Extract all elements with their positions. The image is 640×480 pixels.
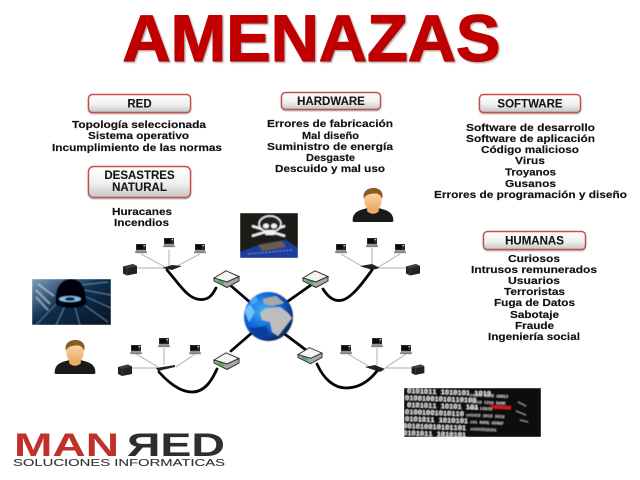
- text block: desastres list: Incendios: [114, 217, 169, 229]
- text block: software list: [434, 122, 627, 201]
- image: binary code with hand: 10101010101: [470, 428, 497, 433]
- image: binary code with hand: 001010010101101: [403, 423, 466, 433]
- text block: hardware list: Mal diseño: [302, 130, 359, 142]
- image: binary code with hand: 01001001010110: [405, 409, 464, 419]
- text block: red list: Sistema operativo: [88, 130, 189, 142]
- text block: hardware list: Suministro de energía: [267, 141, 393, 153]
- image: binary code with hand: 1010 LOGIN: [468, 407, 493, 412]
- text block: hardware list: Descuido y mal uso: [275, 163, 385, 175]
- heading: red: RED: [127, 98, 152, 110]
- text block: humanas list: Fraude: [515, 320, 554, 332]
- heading: hardware: HARDWARE: [297, 96, 365, 108]
- image: binary code with hand: 0101011 1010101 1010: [407, 388, 491, 399]
- text block: software list: Software de aplicación: [466, 133, 595, 145]
- image: binary code with hand: 01001001010110100: [405, 395, 477, 405]
- text block: humanas list: Curiosos: [508, 253, 560, 265]
- text block: humanas list: Ingeniería social: [488, 331, 580, 343]
- cables to globe: [230, 285, 311, 351]
- heading: desastres natural: NATURAL: [112, 182, 167, 194]
- heading: desastres natural: [88, 166, 190, 198]
- logo wordmark: ЯED: [127, 427, 225, 463]
- text block: hardware list: [267, 118, 393, 175]
- text block: software list: Errores de programación y diseño: [434, 189, 627, 201]
- text block: software list: Gusanos: [505, 178, 556, 190]
- text block: software list: Software de desarrollo: [466, 122, 595, 134]
- text block: humanas list: Usuarios: [508, 275, 560, 287]
- text block: software list: Virus: [515, 155, 545, 167]
- heading: humanas: HUMANAS: [505, 236, 564, 248]
- image: binary code with hand: 0101011 10101 101: [407, 402, 479, 412]
- text block: humanas list: Sabotaje: [510, 309, 559, 321]
- image: binary code with hand: 1010 1010 NAME: [472, 401, 506, 407]
- image: hooded hacker: [32, 279, 111, 325]
- text block: red list: Topología seleccionada: [72, 119, 206, 131]
- icon: person top right: [353, 188, 393, 222]
- icon: person left: [55, 340, 95, 374]
- panel: red: [52, 94, 222, 154]
- cluster: bottom right: [298, 338, 424, 388]
- panel: software: [434, 94, 627, 201]
- cluster: top left: [123, 238, 239, 300]
- text block: humanas list: [471, 253, 597, 343]
- text block: humanas list: Fuga de Datos: [494, 297, 575, 309]
- image: skull over keyboard: [240, 213, 298, 258]
- icon: globe: [244, 292, 293, 341]
- title: AMENAZAS: [122, 1, 500, 75]
- text block: software list: Troyanos: [505, 166, 556, 178]
- heading: software: [480, 94, 580, 112]
- logo tagline: SOLUCIONES INFORMATICAS: [13, 458, 225, 469]
- network diagram: [118, 238, 424, 392]
- heading: software: SOFTWARE: [497, 98, 563, 110]
- panel: desastres natural: [88, 166, 190, 229]
- heading: red: [88, 94, 190, 112]
- text block: red list: Incumplimiento de las normas: [52, 142, 222, 154]
- image: binary code with hand: 0101011 1010101: [405, 416, 468, 426]
- text block: hardware list: Errores de fabricación: [267, 118, 393, 130]
- text block: hardware list: Desgaste: [306, 152, 355, 164]
- text block: red list: [52, 119, 222, 154]
- image: binary code with hand: [403, 388, 541, 440]
- text block: software list: Código malicioso: [481, 144, 579, 156]
- text block: humanas list: Intrusos remunerados: [471, 264, 597, 276]
- text block: humanas list: Terroristas: [504, 286, 565, 298]
- logo wordmark: MAN: [14, 427, 119, 463]
- heading: desastres natural: DESASTRES: [104, 170, 175, 182]
- logo: manred: [13, 427, 225, 469]
- panel: humanas: [471, 232, 597, 343]
- logo wordmark: [14, 427, 225, 463]
- image: binary code with hand: 101 NAME ADREF: [470, 421, 504, 427]
- image: binary code with hand: 10101 NAME ADREF: [470, 394, 509, 400]
- panel: hardware: [267, 92, 393, 175]
- image: binary code with hand: 0101011 1010101: [403, 430, 466, 440]
- cluster: bottom left: [118, 338, 239, 392]
- text block: desastres list: [112, 206, 172, 229]
- text block: desastres list: Huracanes: [112, 206, 172, 218]
- image: binary code with hand: 101010 1010 1010: [466, 414, 505, 420]
- cluster: top right: [303, 238, 420, 301]
